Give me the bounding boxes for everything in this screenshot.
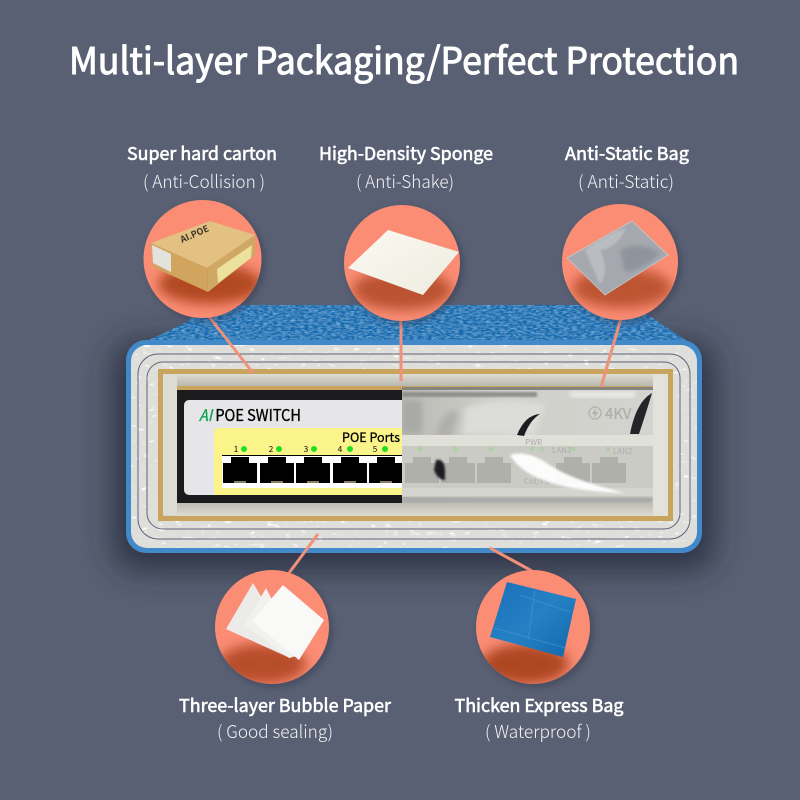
label: anti-static bag xyxy=(565,140,689,194)
item: anti-static bag xyxy=(562,204,682,324)
label: thicken express bag xyxy=(454,692,624,744)
label: three-layer bubble paper: Three-layer Bubble Paper xyxy=(179,692,392,718)
anti-static bag over switch xyxy=(402,387,653,503)
connector lines xyxy=(207,308,624,573)
thicken express bag top xyxy=(147,305,687,341)
label: high-density sponge: ( Anti-Shake) xyxy=(356,169,454,194)
bubble paper layer lines xyxy=(138,354,690,539)
switch front panel xyxy=(177,390,414,503)
item: bubble paper xyxy=(215,570,333,688)
drop shadow xyxy=(112,340,716,572)
port row: 3 xyxy=(304,443,309,455)
package cross-section xyxy=(112,305,716,572)
sponge icon xyxy=(348,230,459,295)
blue bag icon xyxy=(490,582,576,657)
port row: 5 xyxy=(373,443,378,455)
label: super hard carton xyxy=(127,140,277,194)
faded port labels: PWR xyxy=(525,437,542,448)
label: thicken express bag: Thicken Express Bag xyxy=(454,692,624,718)
label: super hard carton: Super hard carton xyxy=(127,140,277,166)
faded port labels: LAN1 xyxy=(552,445,571,456)
item: carton xyxy=(144,200,266,322)
port row: 1 xyxy=(234,443,239,455)
bag icon xyxy=(567,221,668,295)
label: anti-static bag: Anti-Static Bag xyxy=(565,140,689,166)
faded port labels: Cnt/PD xyxy=(524,476,551,487)
bubble paper xyxy=(131,345,697,548)
label: three-layer bubble paper xyxy=(179,692,392,744)
label: three-layer bubble paper: ( Good sealing) xyxy=(217,719,333,744)
bag highlight xyxy=(510,454,625,493)
poe ports label: POE Ports xyxy=(342,427,400,446)
bubble paper sheets icon xyxy=(226,583,324,660)
label: thicken express bag: ( Waterproof ) xyxy=(485,719,591,744)
port row xyxy=(222,443,412,488)
port row: 4 xyxy=(338,443,343,455)
carton box icon: AI.POE xyxy=(177,222,211,246)
switch name: AI POE SWITCH xyxy=(199,402,301,426)
label: anti-static bag: ( Anti-Static) xyxy=(578,169,674,194)
grey band across panel xyxy=(402,435,653,446)
label: super hard carton: ( Anti-Collision ) xyxy=(143,169,265,194)
faded LEDs xyxy=(418,447,610,451)
label: high-density sponge: High-Density Sponge xyxy=(319,140,493,166)
faded ports xyxy=(405,457,439,483)
yellow port area xyxy=(214,428,414,495)
outer blue bag xyxy=(126,340,702,553)
port row: 2 xyxy=(269,443,274,455)
sponge xyxy=(163,374,668,516)
bag creases xyxy=(517,414,540,436)
item: express bag xyxy=(476,570,594,688)
faded port labels: LAN2 xyxy=(613,446,633,457)
faded port labels xyxy=(524,437,633,487)
title: Multi-layer Packaging/Perfect Protection xyxy=(69,31,739,85)
4KV mark xyxy=(588,406,632,420)
4KV mark: 4KV xyxy=(605,403,632,424)
label: high-density sponge xyxy=(319,140,493,194)
item: sponge xyxy=(344,205,464,325)
carton wall xyxy=(158,369,673,521)
